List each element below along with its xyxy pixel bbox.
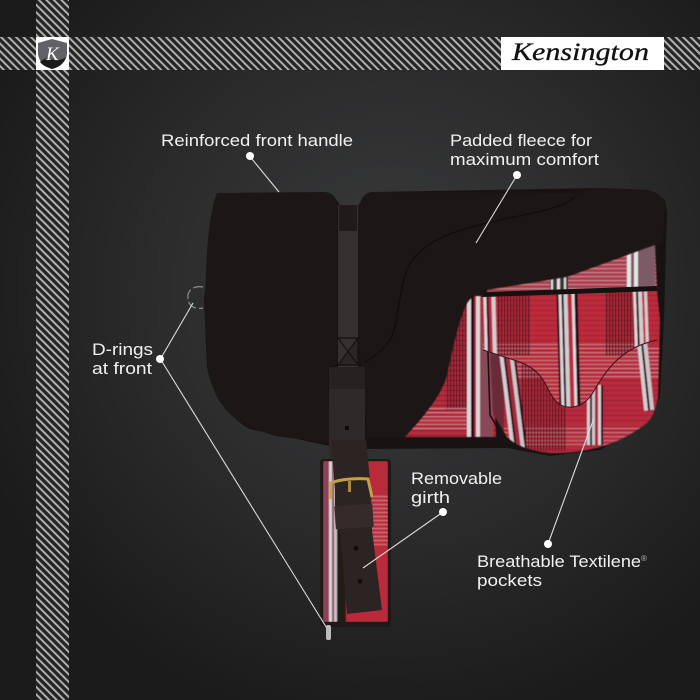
brand logo box: Kensington: [511, 39, 649, 66]
d-ring: [188, 287, 203, 308]
pocket opening band: [481, 286, 657, 297]
label: padded fleece: maximum comfort: [450, 150, 599, 169]
d-ring callout end: [326, 625, 331, 640]
girth plaid lining: [323, 461, 388, 622]
pocket flap seam: [483, 340, 657, 407]
bareback pad: [188, 188, 667, 461]
buckle prong: [348, 481, 351, 492]
strap holes: [354, 546, 362, 584]
plaid: left panel: [404, 295, 497, 438]
plaid: pocket body: [478, 290, 663, 455]
brand logo box: [501, 37, 664, 70]
label: removable girth: Removable: [411, 469, 502, 488]
left fleece panel: [205, 192, 337, 443]
girth strap: [331, 440, 382, 614]
label: removable girth: girth: [411, 488, 450, 507]
label: d-rings: D-rings: [92, 340, 153, 359]
label: removable girth: [411, 469, 502, 507]
front strap: [329, 367, 365, 461]
label: d-rings: [92, 340, 153, 378]
label: breathable pockets: pockets: [477, 571, 542, 590]
label: reinforced front handle: Reinforced front handle: [161, 131, 353, 150]
horizontal hatch band: [0, 37, 700, 70]
callout lines: [161, 159, 594, 630]
icon: shield logo: [36, 37, 69, 70]
label: d-rings: at front: [92, 359, 152, 378]
buckle strap keeper: [334, 504, 374, 529]
vertical hatch band: [36, 0, 69, 700]
center strap: [338, 205, 358, 367]
pad backing: [204, 188, 667, 456]
plaid: top strip: [486, 244, 658, 292]
label: breathable pockets: [477, 552, 647, 590]
buckle: [331, 479, 372, 499]
plaid fabric: [400, 240, 663, 455]
label: padded fleece: [450, 131, 599, 169]
right fleece panel: [357, 188, 665, 437]
label: breathable pockets: ®: [641, 554, 647, 563]
label: padded fleece: Padded fleece for: [450, 131, 592, 150]
girth: [320, 440, 391, 627]
icon: shield logo: K: [45, 44, 60, 65]
callout dots: [156, 152, 552, 548]
plaid: pocket flap: [482, 291, 650, 408]
fleece seam: [365, 197, 575, 362]
label: breathable pockets: Breathable Textilene: [477, 552, 641, 571]
pocket left edge: [488, 352, 500, 432]
